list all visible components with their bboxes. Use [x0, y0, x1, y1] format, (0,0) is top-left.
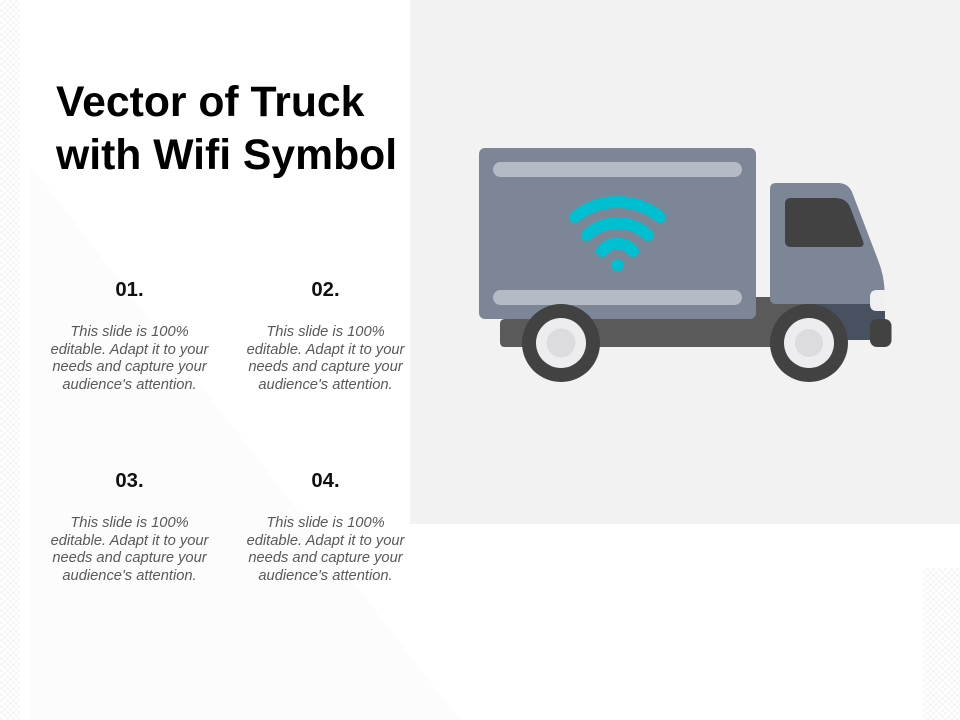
item 03 text: editable. Adapt it to your: [51, 533, 208, 549]
item 03 number: 03.: [115, 470, 144, 492]
item 04 text: audience's attention.: [258, 568, 393, 584]
top stripe: [493, 162, 742, 177]
item 02 text: editable. Adapt it to your: [247, 342, 404, 358]
item 04 text: editable. Adapt it to your: [247, 533, 404, 549]
item 01 text: editable. Adapt it to your: [51, 342, 208, 358]
item 03 text: needs and capture your: [52, 550, 207, 566]
cab lower front: [809, 300, 885, 340]
item 03 text: This slide is 100%: [70, 515, 189, 531]
bumper: [870, 319, 892, 347]
title: [56, 78, 397, 178]
item 04 number: 04.: [311, 470, 340, 492]
gray panel: [410, 0, 960, 524]
texture strip left: [0, 0, 20, 720]
item 03 text: [51, 515, 209, 584]
cargo box: [479, 148, 756, 319]
texture block bottom right: [923, 568, 960, 720]
item 01 text: This slide is 100%: [70, 324, 189, 340]
title: with Wifi Symbol: [56, 130, 397, 178]
bottom stripe: [493, 290, 742, 305]
item 02 number: 02.: [311, 279, 340, 301]
cab window: [785, 198, 864, 247]
item 02 text: This slide is 100%: [266, 324, 385, 340]
item 01 text: audience's attention.: [62, 377, 197, 393]
item 02 text: [247, 324, 405, 393]
item 01 number: 01.: [115, 279, 144, 301]
item 02 text: needs and capture your: [248, 359, 403, 375]
title: Vector of Truck: [56, 78, 364, 126]
chassis: [500, 297, 809, 347]
cab: [770, 183, 884, 304]
item 04 text: [247, 515, 405, 584]
item 04 text: needs and capture your: [248, 550, 403, 566]
item 01 text: [51, 324, 209, 393]
front wheel: [770, 304, 848, 382]
item 01 text: needs and capture your: [52, 359, 207, 375]
icon: wifi symbol: [575, 202, 660, 271]
headlight: [870, 290, 885, 311]
item 02 text: audience's attention.: [258, 377, 393, 393]
rear wheel: [522, 304, 600, 382]
item 03 text: audience's attention.: [62, 568, 197, 584]
item 04 text: This slide is 100%: [266, 515, 385, 531]
